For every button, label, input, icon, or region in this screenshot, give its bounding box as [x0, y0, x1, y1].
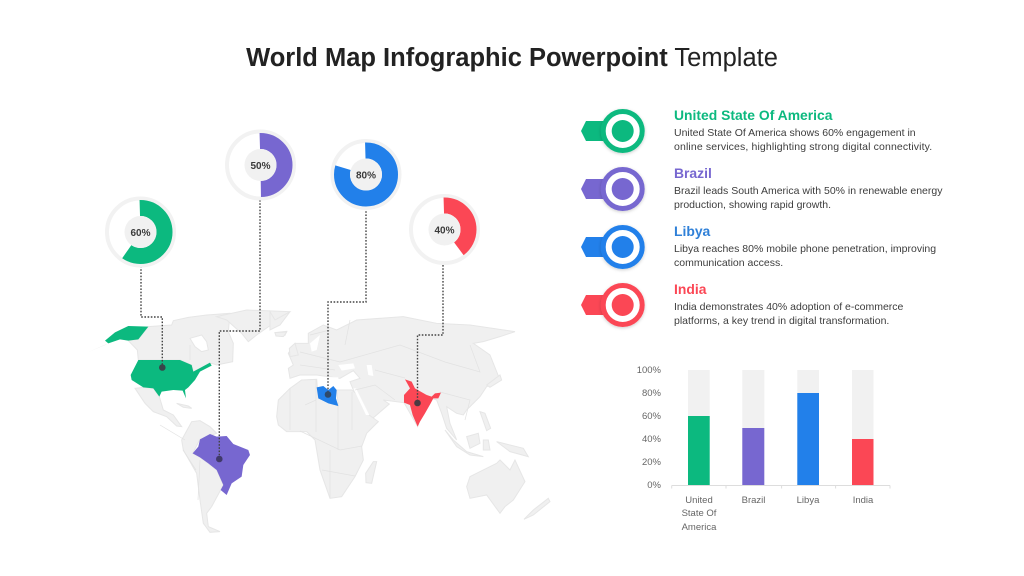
donut: Libya 80%: 80% — [356, 170, 376, 182]
country: India — [404, 379, 441, 427]
text block: Brazil: Brazil — [674, 164, 712, 180]
text block: USA — [674, 106, 932, 152]
connector: Brazil — [216, 200, 260, 462]
bar: Libya — [797, 370, 819, 485]
x axis labels: State Of — [682, 508, 717, 519]
text block: Libya — [674, 222, 936, 268]
donut: India 40% — [411, 196, 478, 263]
x axis labels: Brazil — [742, 495, 765, 506]
americas land — [128, 310, 290, 532]
bar chart — [637, 365, 890, 533]
text block: Libya: communication access. — [674, 256, 783, 268]
x axis labels: America — [682, 522, 717, 533]
text block: India: India demonstrates 40% adoption of e-commerce — [674, 301, 903, 313]
text block: USA: United State Of America — [674, 106, 832, 122]
donut: USA 60% — [107, 198, 174, 266]
y axis labels: 100% — [637, 365, 662, 376]
text block: USA: online services, highlighting strong digital connectivity. — [674, 140, 932, 152]
text block: Libya: Libya — [674, 222, 710, 238]
y axis labels: 80% — [642, 388, 662, 399]
bar: Brazil — [742, 370, 764, 485]
donut: Libya 80% — [332, 141, 400, 208]
x axis labels — [682, 495, 874, 533]
icon: Libya marker — [581, 228, 642, 266]
y axis labels: 60% — [642, 411, 662, 422]
bar: India — [852, 370, 874, 485]
inland seas — [302, 335, 373, 415]
y axis labels: 20% — [642, 457, 662, 468]
grey land masses — [128, 310, 550, 532]
connector: Libya — [325, 208, 366, 398]
highlighted countries — [88, 326, 441, 495]
x axis labels: Libya — [797, 495, 820, 506]
donut: Brazil 50% — [227, 132, 294, 198]
y axis labels: 0% — [647, 480, 662, 491]
europe asia africa land — [270, 312, 550, 519]
country: USA — [88, 326, 212, 398]
donut: Brazil 50%: 50% — [250, 161, 271, 172]
donut: India 40%: 40% — [434, 226, 455, 236]
text block: India: platforms, a key trend in digital transformation. — [674, 314, 889, 326]
text block: India: India — [674, 280, 706, 296]
connector: USA — [141, 266, 166, 371]
text block: India — [674, 280, 903, 326]
title: World Map Infographic Powerpoint Template — [246, 44, 778, 72]
country: Brazil — [193, 434, 250, 495]
text block: Libya: Libya reaches 80% mobile phone penetration, improving — [674, 243, 936, 255]
x axis — [672, 486, 890, 488]
x axis labels: India — [853, 495, 874, 506]
text block: USA: United State Of America shows 60% engagement in — [674, 127, 916, 139]
text block: Brazil: production, showing rapid growth. — [674, 198, 831, 210]
x axis labels: United — [685, 495, 713, 506]
connector: India — [414, 265, 443, 406]
country borders — [160, 320, 480, 500]
y axis labels: 40% — [642, 434, 662, 445]
icon: Brazil marker — [581, 170, 642, 208]
donut: USA 60%: 60% — [130, 228, 151, 239]
bar: USA — [688, 370, 710, 485]
icon: India marker — [581, 286, 642, 324]
country: Libya — [317, 386, 338, 406]
text block: Brazil: Brazil leads South America with 50% in renewable energy — [674, 185, 942, 197]
y axis labels — [637, 365, 662, 491]
text block: Brazil — [674, 164, 942, 210]
icon: USA marker — [581, 112, 642, 150]
